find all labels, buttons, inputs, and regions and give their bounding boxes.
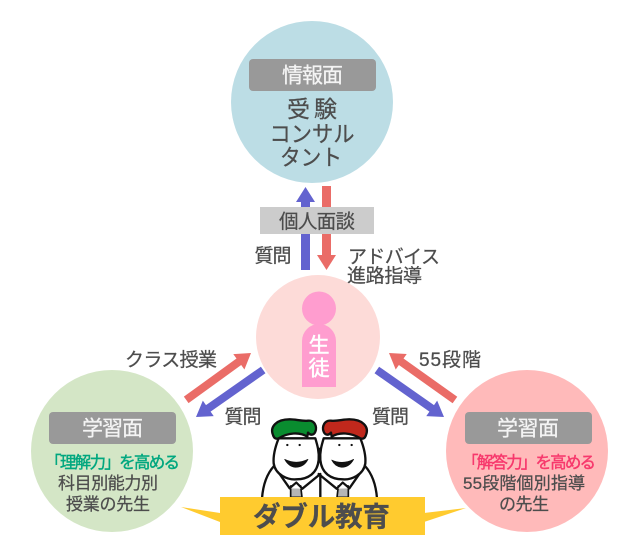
arrow: question right xyxy=(371,362,449,425)
arrow: class lessons xyxy=(181,345,257,408)
label: question top: 質問 xyxy=(254,245,292,267)
panel: information consultant circle: 情報面 xyxy=(282,64,343,88)
label: advice and career guidance: 進路指導 xyxy=(347,265,422,287)
label: question left: 質問 xyxy=(224,406,262,428)
label: class lessons: クラス授業 xyxy=(125,349,217,371)
panel: student circle xyxy=(256,275,380,399)
panel: learning circle, understanding: 「理解力」を高める xyxy=(45,453,180,472)
icon: student figure xyxy=(302,292,336,387)
panel: learning circle, understanding: 科目別能力別 xyxy=(58,474,158,493)
teacher: red hair xyxy=(319,419,377,498)
arrow: question left xyxy=(191,362,269,425)
panel: learning circle, answering: 55段階個別指導 xyxy=(463,474,585,493)
label: question right: 質問 xyxy=(372,406,409,428)
icon: student figure: 生 xyxy=(308,334,330,358)
label: advice and career guidance xyxy=(347,247,440,287)
panel: learning circle, answering: 学習面 xyxy=(497,418,559,440)
panel: learning circle, answering: 「解答力」を高める xyxy=(462,453,596,472)
banner: double education: ダブル教育 xyxy=(253,501,390,532)
panel: learning circle, understanding xyxy=(31,370,193,532)
panel: learning circle, understanding: 授業の先生 xyxy=(66,495,150,514)
panel: information consultant circle: タント xyxy=(280,146,342,170)
arrow: advice down xyxy=(317,186,336,270)
label: advice and career guidance: アドバイス xyxy=(348,247,440,268)
icon: student figure: 徒 xyxy=(308,358,330,380)
teacher: green hair xyxy=(262,419,321,498)
panel: information consultant circle: コンサル xyxy=(270,122,354,147)
illustration: two teachers xyxy=(262,419,377,498)
label: individual interview: 個人面談 xyxy=(279,211,355,233)
label: individual interview xyxy=(260,207,374,234)
panel: information consultant circle: 受験 xyxy=(287,96,337,122)
panel: information consultant circle xyxy=(231,21,393,183)
panel: learning circle, answering xyxy=(446,370,608,532)
panel: learning circle, understanding: 学習面 xyxy=(82,418,143,440)
label: 55 levels: 55段階 xyxy=(419,349,481,371)
arrow: question up xyxy=(296,187,315,270)
arrow: 55 levels xyxy=(383,345,460,408)
panel: learning circle, answering: の先生 xyxy=(499,495,549,514)
banner: double education xyxy=(181,497,466,535)
